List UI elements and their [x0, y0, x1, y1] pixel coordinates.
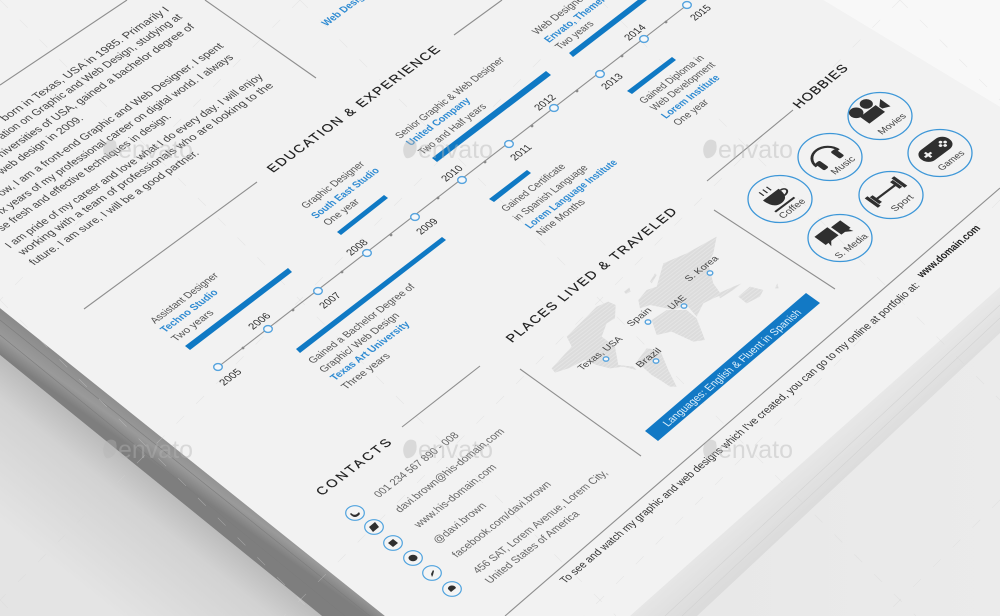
hobby: sport — [859, 172, 923, 218]
timeline bars — [185, 0, 676, 353]
watermarks: envato — [718, 136, 793, 164]
entry: bachelor degree: Gained a Bachelor Degree of — [306, 282, 418, 366]
about text block: ow, I am a front-end Graphic and Web Designer. I spent — [0, 41, 227, 198]
entry: senior designer — [393, 55, 508, 157]
entry: senior designer: Senior Graphic & Web Designer — [393, 55, 508, 141]
timeline: 2011 — [508, 142, 535, 163]
heading: education and experience: EDUCATION & EXPERIENCE — [263, 43, 444, 175]
hobby: music: Music — [828, 155, 858, 177]
timeline: 2008 — [344, 237, 371, 258]
about text block: ix years of my professional career on digital world. I always — [0, 52, 237, 216]
hobby: coffee — [748, 176, 812, 222]
map markers: UAE — [665, 294, 689, 312]
background top right — [823, 0, 1000, 107]
heading: places lived and traveled: PLACES LIVED & TRAVELED — [502, 205, 680, 345]
timeline: 2006 — [246, 311, 274, 332]
hobby: social media: S. Media — [832, 232, 872, 261]
watermarks — [103, 136, 793, 464]
world map — [552, 237, 779, 387]
entry: web development diploma: Web Development — [648, 60, 718, 113]
entry: graphic designer: South East Studio — [309, 166, 382, 221]
entry: bachelor degree: Texas Art University — [328, 319, 413, 383]
about text block: future. I am sure, I will be a good partner. — [27, 148, 202, 267]
watermarks: envato — [118, 136, 193, 164]
hobby: movies: Movies — [875, 112, 909, 137]
watermarks: envato — [718, 436, 793, 464]
entry: assistant designer: Two years — [169, 308, 217, 344]
entry: web development diploma: Gained Diploma in — [637, 53, 707, 106]
watermarks: envato — [418, 136, 493, 164]
hobby: games: Games — [935, 149, 968, 173]
entry: spanish certificate: in Spanish Language — [511, 163, 591, 223]
heading: hobbies: HOBBIES — [789, 62, 851, 111]
entry: bachelor degree: Graphic/ Web Design — [317, 311, 403, 375]
map markers: Spain — [624, 306, 655, 329]
hobby: coffee: Coffee — [776, 197, 809, 221]
contact details: facebook.com/davi.brown — [450, 480, 554, 560]
entry: web development diploma — [637, 53, 723, 128]
entry: spanish certificate — [499, 158, 621, 238]
hobbies circles — [748, 92, 972, 262]
shadow under stack — [0, 355, 322, 616]
map markers: Brazil — [633, 346, 665, 370]
paper stack right side — [630, 287, 1000, 616]
entry: senior designer: Two and Half years — [416, 102, 489, 157]
contact icons — [346, 506, 461, 596]
timeline — [214, 2, 714, 388]
timeline: 2007 — [317, 290, 344, 311]
timeline: 2015 — [688, 3, 714, 23]
entry: spanish certificate: Nine Months — [534, 197, 588, 238]
entry: graphic designer: Graphic Designer — [299, 159, 368, 211]
hobby: games — [908, 130, 972, 176]
hobby: music — [798, 134, 862, 180]
entry: web development diploma: Lorem Institute — [659, 73, 723, 121]
map markers: S. Korea — [682, 254, 722, 284]
contact details: www.his-domain.com — [411, 462, 500, 530]
entry: web designer: Two years — [553, 19, 597, 52]
about text block: ation on Graphic and Web Design, studying at — [0, 12, 185, 141]
languages banner: Languages: English & Fluent in Spanish — [661, 308, 805, 429]
contact details: United States of America — [483, 509, 583, 586]
entry: senior designer: United Company — [404, 96, 474, 148]
timeline: 2010 — [439, 163, 466, 184]
about text block: working with a team of professionals who are looking to the — [15, 81, 277, 258]
about text block: se fresh and effective techniques in design. — [0, 112, 174, 233]
entry: assistant designer — [148, 271, 222, 344]
entry: spanish certificate: Gained Certificate — [499, 162, 569, 214]
entry: spanish certificate: Lorem Language Institute — [523, 158, 621, 231]
contact details: 001 234 567 890 - 008 — [372, 431, 462, 500]
footer note: To see and watch my graphic and web designs which I've created, you can go to my online at portfolio at: — [558, 280, 923, 586]
contact details: 456 SAT, Lorem Avenue, Lorem City, — [471, 468, 611, 576]
entry: graphic designer: One year — [321, 197, 363, 228]
about text block: niversities of USA, gained a bachelor degree of — [0, 22, 198, 159]
entry: assistant designer: Techno Studio — [158, 288, 221, 335]
map markers: Texas, USA — [575, 334, 626, 373]
entry: bachelor degree: Three years — [339, 351, 393, 392]
footer note: www.domain.com — [914, 223, 984, 280]
about text block — [0, 5, 277, 267]
hobby: sport: Sport — [888, 193, 917, 214]
hobby: social media — [808, 214, 872, 262]
heading: contacts: CONTACTS — [312, 436, 395, 498]
map markers — [575, 254, 722, 373]
paper stack left side — [0, 308, 385, 616]
entry: assistant designer: Assistant Designer — [148, 271, 222, 326]
timeline: 2012 — [532, 92, 559, 113]
about text block: born in Texas, USA in 1985. Primarily I — [0, 5, 172, 123]
contact details: @davi.brown — [431, 501, 489, 546]
watermarks: envato — [418, 436, 493, 464]
timeline: 2009 — [414, 216, 441, 237]
contact details — [372, 427, 611, 586]
hobby: movies — [846, 92, 912, 140]
watermarks: envato — [118, 436, 193, 464]
timeline: 2005 — [217, 367, 245, 388]
timeline: 2014 — [622, 22, 649, 43]
about text block: I am pride of my career and love what I do every day. I will enjoy — [3, 72, 267, 250]
entry: web development diploma: One year — [671, 97, 712, 128]
timeline: 2013 — [599, 71, 626, 92]
contact details: davi.brown@his-domain.com — [393, 427, 508, 515]
